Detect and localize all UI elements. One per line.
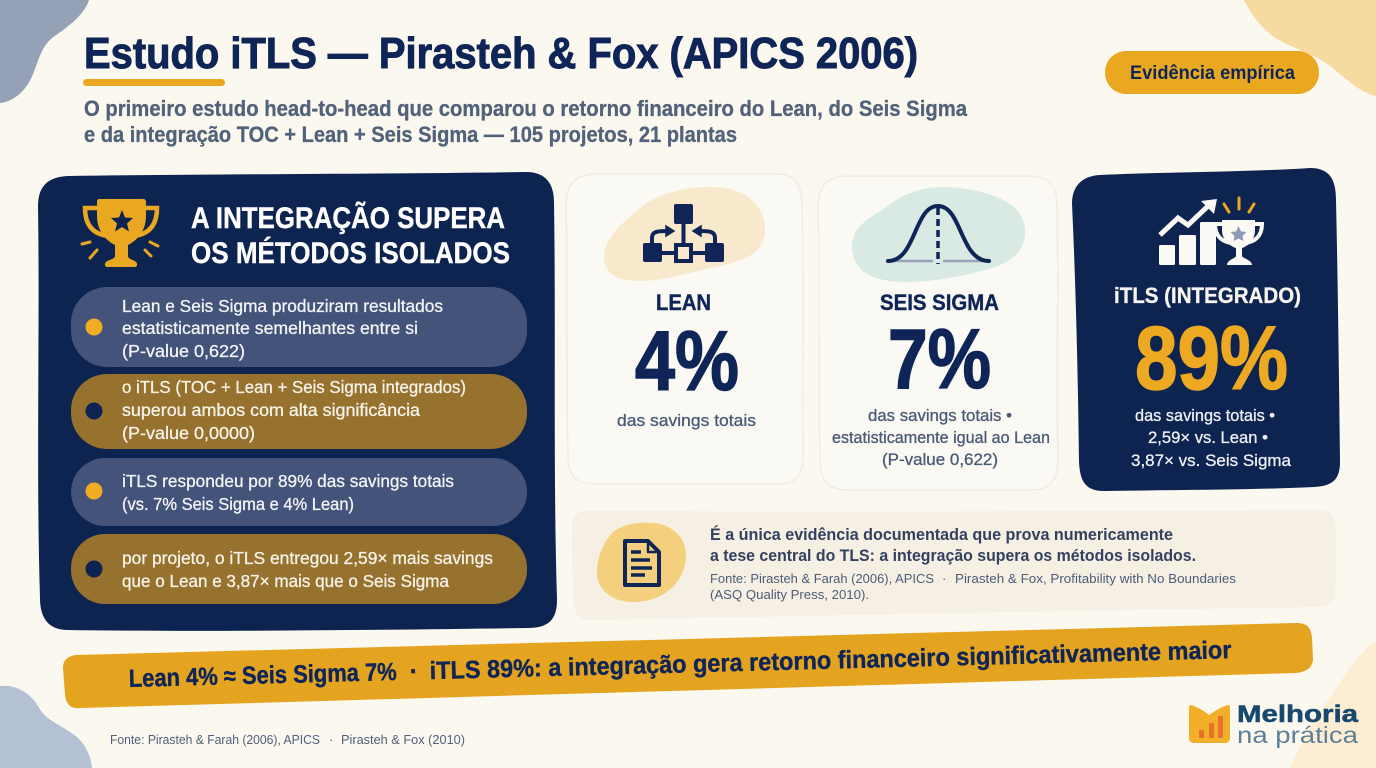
card: lean <box>566 174 803 484</box>
icon blob <box>852 187 1025 282</box>
subtitle: e da integração TOC + Lean + Seis Sigma — 105 projetos, 21 plantas <box>84 122 737 147</box>
finding 3: iTLS respondeu por 89% das savings totais <box>122 471 454 491</box>
callout source: · <box>942 571 946 586</box>
callout source: Pirasteh & Fox, Profitability with No Boundaries <box>955 571 1237 586</box>
panel heading: OS MÉTODOS ISOLADOS <box>191 236 510 270</box>
icon: process flow <box>643 204 724 262</box>
lean label: LEAN <box>656 290 711 315</box>
finding 1: (P-value 0,622) <box>122 341 245 361</box>
decorative blob: bottom right <box>1290 640 1376 768</box>
finding 2: (P-value 0,0000) <box>122 423 255 443</box>
seis sigma description <box>832 406 1050 469</box>
decorative blob: bottom left <box>0 686 92 768</box>
seis sigma value: 7% <box>888 312 991 406</box>
card: seis sigma <box>818 176 1058 490</box>
callout: única evidência <box>572 510 1336 620</box>
logo: melhoria na prática <box>1189 701 1359 748</box>
banner: conclusion <box>63 623 1313 708</box>
decorative blob: top right <box>1244 0 1376 96</box>
panel heading: A INTEGRAÇÃO SUPERA <box>191 201 505 235</box>
callout source: (ASQ Quality Press, 2010). <box>710 587 869 602</box>
badge: evidência empírica: Evidência empírica <box>1130 63 1295 84</box>
title underline <box>83 79 225 86</box>
finding 3: (vs. 7% Seis Sigma e 4% Lean) <box>122 494 354 514</box>
logo icon <box>1189 705 1230 743</box>
panel heading <box>191 201 510 270</box>
banner text: · <box>409 657 418 686</box>
finding 4 <box>71 534 527 604</box>
seis sigma description: estatisticamente igual ao Lean <box>832 428 1050 447</box>
banner text: iTLS 89%: a integração gera retorno financeiro significativamente maior <box>429 636 1232 685</box>
callout statement <box>710 525 1196 565</box>
footer source: Pirasteh & Fox (2010) <box>341 732 465 747</box>
icon: bell curve <box>888 206 989 264</box>
icon blob <box>597 523 686 602</box>
lean value: 4% <box>635 314 739 408</box>
subtitle <box>84 96 968 147</box>
finding 4: por projeto, o iTLS entregou 2,59× mais savings <box>122 548 493 568</box>
itls value: 89% <box>1135 309 1288 409</box>
card: itls <box>1072 168 1340 491</box>
icon: growth chart and trophy <box>1159 198 1262 265</box>
itls description <box>1131 406 1292 470</box>
callout source: Fonte: Pirasteh & Farah (2006), APICS <box>710 571 934 586</box>
logo: melhoria na prática: na prática <box>1237 722 1358 748</box>
callout statement: É a única evidência documentada que prova numericamente <box>710 525 1173 544</box>
finding 1: estatisticamente semelhantes entre si <box>122 318 418 338</box>
subtitle: O primeiro estudo head-to-head que comparou o retorno financeiro do Lean, do Seis Sigma <box>84 96 968 121</box>
icon: document <box>625 541 659 585</box>
seis sigma label: SEIS SIGMA <box>880 290 999 315</box>
seis sigma description: (P-value 0,622) <box>882 450 998 469</box>
finding 4: que o Lean e 3,87× mais que o Seis Sigma <box>122 571 449 591</box>
itls description: 2,59× vs. Lean • <box>1148 428 1268 447</box>
icon blob <box>604 187 765 281</box>
callout source <box>710 571 1237 602</box>
footer source: Fonte: Pirasteh & Farah (2006), APICS <box>110 732 320 747</box>
finding 2: superou ambos com alta significância <box>122 400 420 420</box>
itls description: das savings totais • <box>1135 406 1275 425</box>
itls label: iTLS (INTEGRADO) <box>1114 283 1301 308</box>
finding 3 <box>71 458 527 526</box>
icon: trophy <box>82 199 158 267</box>
decorative blob: top left <box>0 0 89 103</box>
finding 1: Lean e Seis Sigma produziram resultados <box>122 296 443 316</box>
itls description: 3,87× vs. Seis Sigma <box>1131 451 1292 470</box>
callout statement: a tese central do TLS: a integração supera os métodos isolados. <box>710 547 1196 565</box>
panel: a integração supera <box>38 172 557 631</box>
lean description: das savings totais <box>617 411 756 430</box>
footer source <box>110 732 465 747</box>
seis sigma description: das savings totais • <box>868 406 1012 425</box>
banner text: Lean 4% ≈ Seis Sigma 7% <box>128 658 397 693</box>
badge: evidência empírica <box>1105 51 1319 94</box>
banner text <box>128 636 1232 693</box>
finding 2: o iTLS (TOC + Lean + Seis Sigma integrados) <box>122 377 466 397</box>
finding 1 <box>71 287 527 367</box>
finding 2 <box>71 374 527 449</box>
logo wordmark: Melhoria <box>1237 701 1359 728</box>
title: Estudo iTLS — Pirasteh & Fox (APICS 2006) <box>84 29 918 78</box>
footer source: · <box>329 732 333 747</box>
